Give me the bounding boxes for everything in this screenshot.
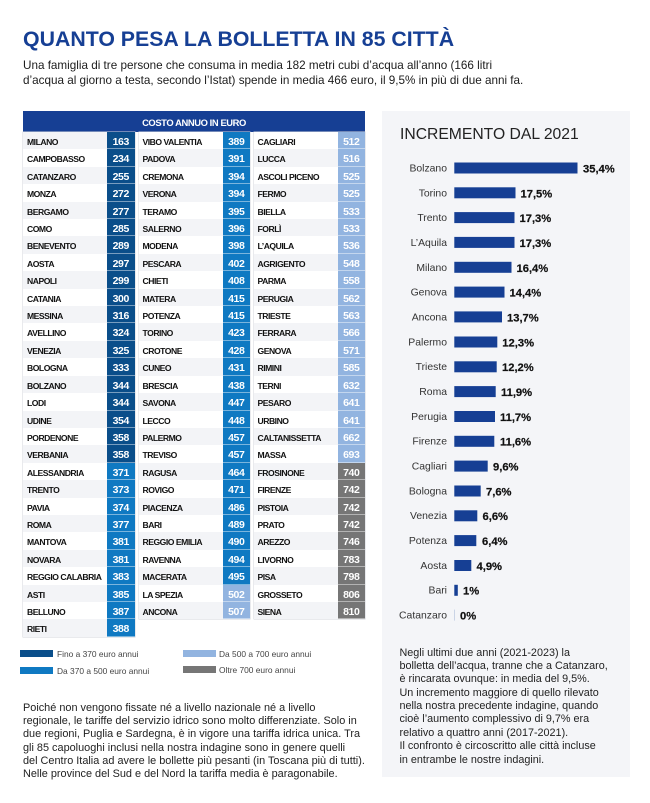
table column 3: 512 [343,136,359,148]
table column 1: PAVIA [27,503,50,513]
table column 2: ROVIGO [142,485,174,495]
bar chart: 35,4% [583,164,615,176]
table column 3: L’AQUILA [258,241,294,251]
bar chart: 13,7% [507,312,539,324]
table column 1: 381 [113,536,129,548]
table column 3: 585 [343,362,359,374]
table column 2: 398 [228,240,244,252]
table column 2: MATERA [142,294,176,304]
table column 2: 396 [228,223,244,235]
bar chart: 12,2% [502,362,534,374]
table column 3: RIMINI [258,363,281,373]
panel note text: nella nostra precedente indagine, quando [400,700,598,712]
bar chart: Roma [419,387,447,398]
table column 2: 431 [228,362,244,374]
bar chart: Torino [419,188,447,199]
legend: Da 370 a 500 euro annui [57,666,149,676]
table column 3: FORLÌ [258,224,281,234]
bar chart: Genova [411,288,447,299]
table column 2: 471 [228,484,244,496]
body paragraph: regionale, le tariffe del servizio idrico sono molto differenziate. Solo in [23,715,357,727]
table column 2: 507 [228,606,244,618]
table column 3: 641 [343,397,359,409]
table column 3: 662 [343,432,359,444]
table column 3: 571 [343,345,359,357]
bar chart: 12,3% [502,337,534,349]
table column 1: PORDENONE [27,433,78,443]
table column 1: BELLUNO [27,607,65,617]
table column 3: 566 [343,327,359,339]
table column 1: ALESSANDRIA [27,468,84,478]
body paragraph: del Centro Italia ad avere le bollette più pesanti (in Toscana più di tutti). [23,755,365,767]
table column 3: 533 [343,223,359,235]
panel: incremento dal 2021 [382,111,630,777]
table column 1: ASTI [27,590,45,600]
panel note text: cioè l’aumento complessivo di 9,7% era [400,713,589,725]
bar chart: 6,4% [482,536,508,548]
table column 2: TREVISO [142,450,177,460]
table column 3: TERNI [258,381,281,391]
table column 2: CREMONA [142,172,184,182]
panel note text: Il confronto è circoscritto alle città incluse [400,740,596,752]
panel note text: bolletta dell’acqua, tranne che a Catanzaro, [400,660,608,672]
table column 2: POTENZA [142,311,180,321]
table column 1: 385 [113,589,129,601]
bar chart: 14,4% [510,288,541,300]
table column 2: 448 [228,414,244,426]
panel note text: Negli ultimi due anni (2021-2023) la [400,646,570,658]
table column 3: 525 [343,188,359,200]
table column 1: CATANZARO [27,172,76,182]
table column 3: FERRARA [258,328,296,338]
table column 2: TERAMO [142,207,177,217]
table column 2: 423 [228,327,244,339]
bar chart: 17,3% [520,213,551,225]
table column 2: 428 [228,345,244,357]
table column 1: COMO [27,224,52,234]
table column 1: UDINE [27,416,51,426]
table column 2: 415 [228,310,244,322]
panel note text [400,646,608,766]
table column 3: 742 [343,484,359,496]
table column 3 [254,132,365,619]
table column 2: 408 [228,275,244,287]
table column 3: 548 [343,258,359,270]
intro text: d’acqua al giorno a testa, secondo l’Istat) spende in media 466 euro, il 9,5% in più di due anni fa. [23,74,523,87]
table column 3: PERUGIA [258,294,293,304]
table column 2: 464 [228,467,244,479]
legend: Fino a 370 euro annui [57,649,138,659]
table column 2: 391 [228,153,244,165]
body paragraph: Nelle province del Sud e del Nord la tariffa media è paragonabile. [23,768,338,780]
body paragraph: Poiché non vengono fissate né a livello nazionale né a livello [23,702,315,714]
table column 3: 516 [343,153,359,165]
table column 1: CAMPOBASSO [27,154,85,164]
table column 2: PALERMO [142,433,181,443]
table column 3: ASCOLI PICENO [258,172,319,182]
table header [23,110,365,132]
table column 2: REGGIO EMILIA [142,537,202,547]
table column 1: NOVARA [27,555,61,565]
table column 1: AVELLINO [27,328,66,338]
table column 2: PESCARA [142,259,181,269]
bar chart: Cagliari [412,461,447,472]
bar chart: Bari [429,586,447,597]
table column 2 [138,132,250,619]
table column 3: 810 [343,606,359,618]
table column 1: MONZA [27,189,56,199]
table column 3: 742 [343,502,359,514]
table column 1: CATANIA [27,294,61,304]
bar chart: Ancona [412,312,447,323]
table column 1: 277 [113,206,129,218]
table column 3: FERMO [258,189,286,199]
bar chart: 11,6% [500,437,531,449]
table column 2: MODENA [142,241,178,251]
table column 3: 525 [343,171,359,183]
table column 1: BERGAMO [27,207,69,217]
bar chart: 11,7% [500,412,531,424]
table column 1: VENEZIA [27,346,61,356]
table column 2: SALERNO [142,224,181,234]
table column 2: MACERATA [142,572,187,582]
body paragraph: gli 85 capoluoghi inclusi nella nostra indagine sono in genere quelli [23,742,345,754]
table column 3: PISTOIA [258,503,288,513]
table column 2: 402 [228,258,244,270]
bar chart: 7,6% [486,486,512,498]
body paragraph [23,702,365,780]
table column 1: TRENTO [27,485,59,495]
table column 1: 344 [113,397,129,409]
table column 2: 490 [228,536,244,548]
table column 3: PARMA [258,276,286,286]
table column 2: RAGUSA [142,468,177,478]
table column 3: 558 [343,275,359,287]
bar chart: 9,6% [493,461,519,473]
table column 2: BRESCIA [142,381,178,391]
body paragraph: due regioni, Puglia e Sardegna, è in vigore una tariffa idrica unica. Tra [23,728,360,740]
table column 3: GENOVA [258,346,291,356]
bar chart: 11,9% [501,387,532,399]
table column 3: LUCCA [258,154,285,164]
panel note text: Un incremento maggiore di quello rilevato [400,687,599,699]
table column 1: REGGIO CALABRIA [27,572,101,582]
table column 1: 316 [113,310,129,322]
table column 1 [23,132,134,637]
table column 3: 783 [343,554,359,566]
table column 1: 272 [113,188,129,200]
table column 2: PIACENZA [142,503,183,513]
bar chart: Trieste [416,362,447,373]
table column 2: PADOVA [142,154,175,164]
table column 3: 740 [343,467,359,479]
table column 2: 502 [228,589,244,601]
table column 1: 234 [113,153,129,165]
table column 1: NAPOLI [27,276,57,286]
table column 1: 374 [113,502,129,514]
legend: Oltre 700 euro annui [219,665,295,675]
bar chart: Perugia [411,412,447,423]
table column 1: VERBANIA [27,450,68,460]
table column 1: AOSTA [27,259,54,269]
table column 3: 632 [343,380,359,392]
bar chart [399,162,615,622]
table column 1: 377 [113,519,129,531]
bar chart: 17,5% [520,188,552,200]
bar chart: Bologna [409,486,447,497]
table column 2: ANCONA [142,607,177,617]
bar chart: Milano [416,263,447,274]
table column 2: LA SPEZIA [142,590,183,600]
table column 3: SIENA [258,607,281,617]
bar chart: L’Aquila [411,238,447,249]
table column 2: CHIETI [142,276,168,286]
bar chart: Catanzaro [399,610,447,621]
table column 1: 163 [113,136,129,148]
table column 1: 381 [113,554,129,566]
bar chart: 1% [463,586,479,598]
intro text: Una famiglia di tre persone che consuma in media 182 metri cubi d’acqua all’anno (166 litri [23,59,492,72]
table column 2: CROTONE [142,346,182,356]
title: QUANTO PESA LA BOLLETTA IN 85 CITTÀ [23,27,454,51]
table column 1: 387 [113,606,129,618]
table column 2: RAVENNA [142,555,181,565]
table column 3: PISA [258,572,276,582]
table column 3: 563 [343,310,359,322]
table column 3: URBINO [258,416,289,426]
table column 2: SAVONA [142,398,176,408]
table column 1: 371 [113,467,129,479]
bar chart: Bolzano [409,164,447,174]
bar chart: 17,3% [520,238,551,250]
table column 2: 438 [228,380,244,392]
bar chart: 16,4% [516,263,548,275]
table column 1: BOLZANO [27,381,66,391]
table column 1: 324 [113,327,129,339]
table column 1: 358 [113,449,129,461]
table column 3: 562 [343,293,359,305]
table header: COSTO ANNUO IN EURO [142,116,246,128]
table column 1: 344 [113,380,129,392]
table column 2: 394 [228,188,244,200]
bar chart: 0% [460,610,476,622]
table column 3: 693 [343,449,359,461]
table column 3: GROSSETO [258,590,302,600]
legend: Da 500 a 700 euro annui [219,649,311,659]
table column 3: 536 [343,240,359,252]
table column 2: 394 [228,171,244,183]
table column 3: CALTANISSETTA [258,433,321,443]
table column 1: 325 [113,345,129,357]
table column 2: VERONA [142,189,176,199]
table column 2: 495 [228,571,244,583]
table column 1: 358 [113,432,129,444]
table column 3: CAGLIARI [258,137,295,147]
table column 2: 486 [228,502,244,514]
table column 1: BOLOGNA [27,363,68,373]
bar chart: Palermo [408,337,447,348]
table column 3: PRATO [258,520,284,530]
table column 3: PESARO [258,398,291,408]
table column 3: FIRENZE [258,485,291,495]
table column 1: 285 [113,223,129,235]
table column 1: 373 [113,484,129,496]
table column 1: ROMA [27,520,51,530]
table column 1: BENEVENTO [27,241,76,251]
bar chart: Venezia [410,511,447,522]
table column 2: 489 [228,519,244,531]
table column 1: 388 [113,623,129,635]
table column 3: 533 [343,206,359,218]
table column 3: 641 [343,414,359,426]
table column 3: 746 [343,536,359,548]
table column 3: AGRIGENTO [258,259,305,269]
table column 1: 383 [113,571,129,583]
table column 3: MASSA [258,450,286,460]
bar chart: Firenze [412,437,447,448]
table column 3: LIVORNO [258,555,293,565]
bar chart: Trento [417,213,447,224]
table column 3: 742 [343,519,359,531]
table column 1: 289 [113,240,129,252]
legend [20,649,311,676]
table column 2: 447 [228,397,244,409]
table column 2: 494 [228,554,244,566]
panel heading: INCREMENTO DAL 2021 [400,126,579,143]
panel note text: in entrambe le nostre indagini. [400,754,544,766]
table column 1: 354 [113,414,129,426]
table column 1: LODI [27,398,46,408]
bar chart: Aosta [420,561,447,572]
table column 3: AREZZO [258,537,290,547]
bar chart: 6,6% [482,511,508,523]
table column 1: 300 [113,293,129,305]
table column 3: BIELLA [258,207,286,217]
intro text [23,59,523,87]
table column 2: LECCO [142,416,170,426]
table column 1: MANTOVA [27,537,66,547]
table column 1: 255 [113,171,129,183]
table column 2: TORINO [142,328,173,338]
table column 2: 389 [228,136,244,148]
table column 1: 297 [113,258,129,270]
table column 3: 806 [343,589,359,601]
table column 1: RIETI [27,624,47,634]
table column 2: 457 [228,449,244,461]
table column 2: VIBO VALENTIA [142,137,202,147]
bar chart: 4,9% [476,561,502,573]
bar chart: Potenza [409,536,447,547]
table column 3: TRIESTE [258,311,290,321]
table column 1: MESSINA [27,311,63,321]
table column 2: BARI [142,520,162,530]
table column 2: 457 [228,432,244,444]
table column 2: 395 [228,206,244,218]
table column 2: CUNEO [142,363,171,373]
table column 1: MILANO [27,137,58,147]
table column 2: 415 [228,293,244,305]
table column 1: 299 [113,275,129,287]
table column 3: FROSINONE [258,468,304,478]
table column 3: 798 [343,571,359,583]
panel note text: relativo a quattro anni (2017-2021). [400,727,568,739]
panel note text: è rincarata ovunque: in media del 9,5%. [400,673,590,685]
table column 1: 333 [113,362,129,374]
